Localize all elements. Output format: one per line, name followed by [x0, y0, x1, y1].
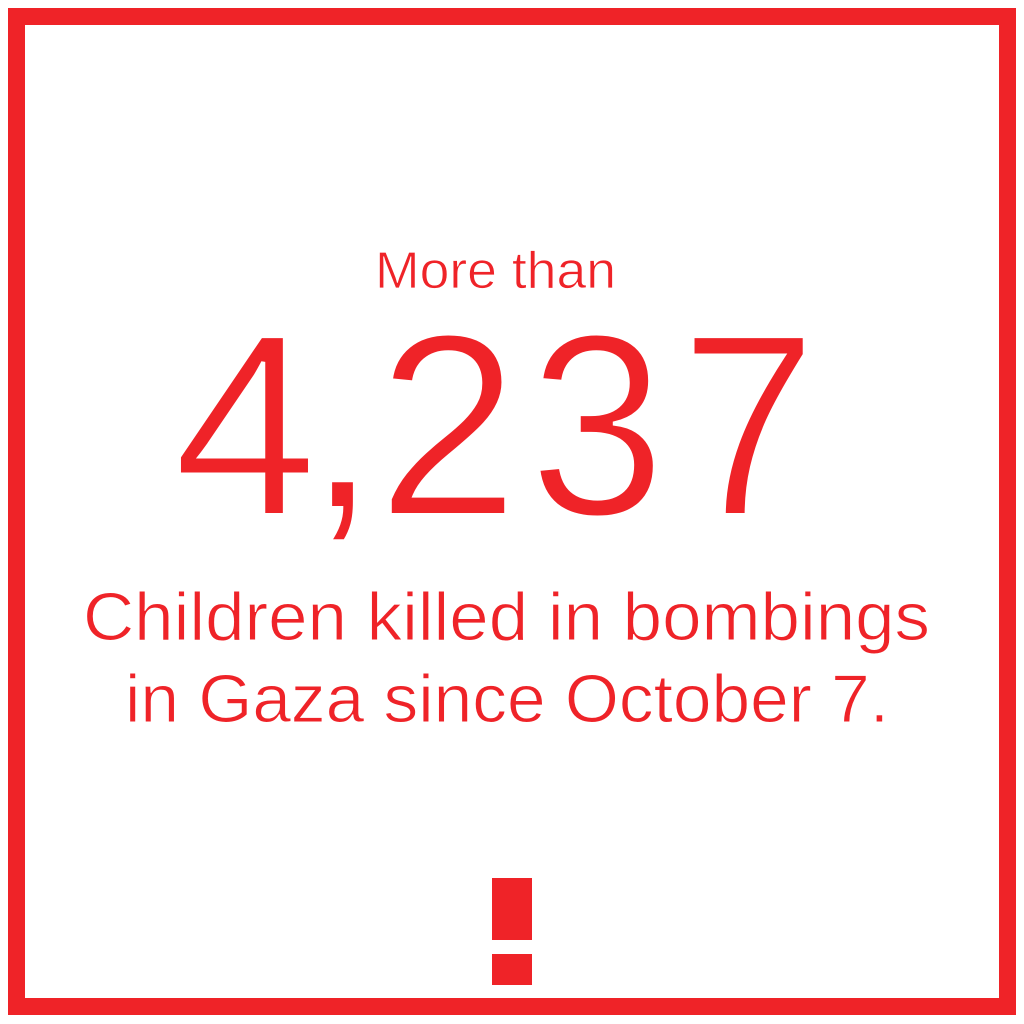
headline number — [173, 274, 817, 571]
description line 1: Children killed in bombings — [83, 579, 930, 655]
icon: exclamation mark logo — [492, 878, 532, 985]
headline number: 4 — [173, 281, 318, 571]
lead-in text: More than — [375, 242, 616, 300]
headline number: , — [306, 274, 378, 564]
headline number: 7 — [680, 281, 817, 571]
description line 2: in Gaza since October 7. — [125, 661, 889, 737]
headline number: 3 — [529, 281, 666, 571]
headline number: 2 — [377, 281, 519, 571]
